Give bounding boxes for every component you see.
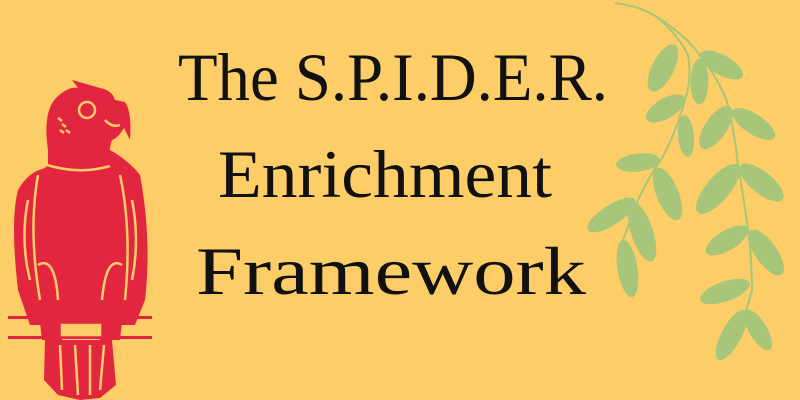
head (46, 80, 130, 170)
perch (8, 316, 152, 319)
tail (44, 340, 116, 400)
body (14, 150, 148, 325)
title (178, 39, 608, 309)
title: Enrichment (218, 136, 552, 212)
feet (38, 305, 62, 340)
title: Framework (196, 233, 586, 309)
illustration: parrot (8, 80, 152, 400)
title: The S.P.I.D.E.R. (178, 39, 608, 115)
parrot details (24, 102, 136, 395)
illustration: hanging vine leaves (583, 3, 791, 364)
